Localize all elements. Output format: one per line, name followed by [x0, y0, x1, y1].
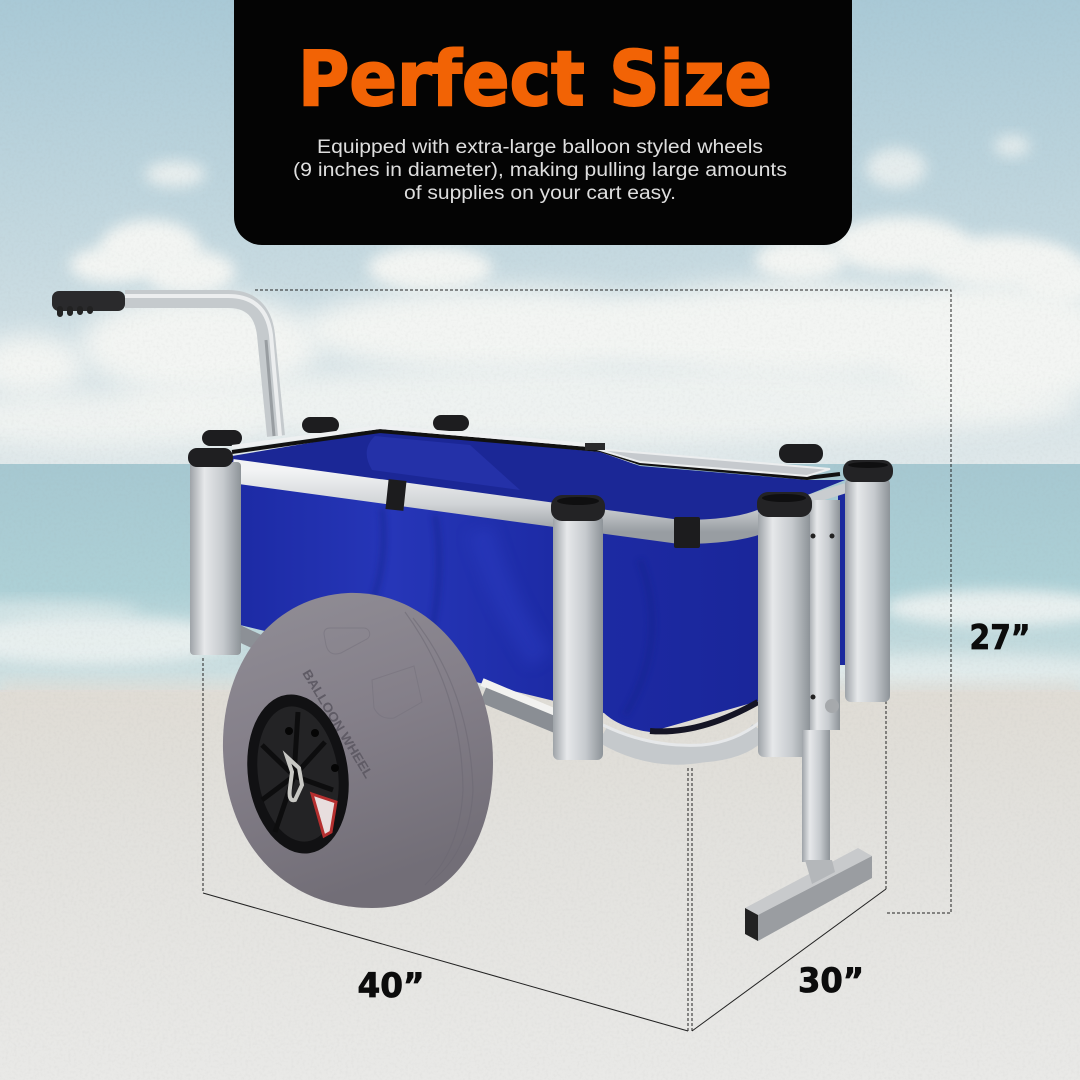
hub [237, 688, 359, 860]
dimension label: width: 30” [798, 961, 864, 1001]
title: Perfect Size [298, 34, 772, 123]
rod holders [188, 448, 893, 760]
far rail [232, 427, 840, 478]
handle [52, 291, 280, 436]
bottom frame [482, 682, 760, 755]
balloon wheel [223, 593, 493, 908]
description: Equipped with extra-large balloon styled wheels [317, 137, 763, 158]
cart product [52, 291, 893, 941]
dimension label: length: 40” [358, 966, 424, 1006]
front leg and foot [745, 730, 872, 941]
dimension label: height: 27” [970, 618, 1030, 658]
blue fabric basket [232, 431, 846, 732]
description [293, 137, 787, 204]
tire sidewall lettering: BALLOON WHEEL [299, 667, 376, 781]
header panel [234, 0, 852, 245]
description: (9 inches in diameter), making pulling large amounts [293, 160, 787, 181]
front rail [232, 471, 846, 548]
back rod holder caps [202, 415, 823, 463]
description: of supplies on your cart easy. [404, 183, 676, 204]
dimension lines [203, 290, 951, 1031]
